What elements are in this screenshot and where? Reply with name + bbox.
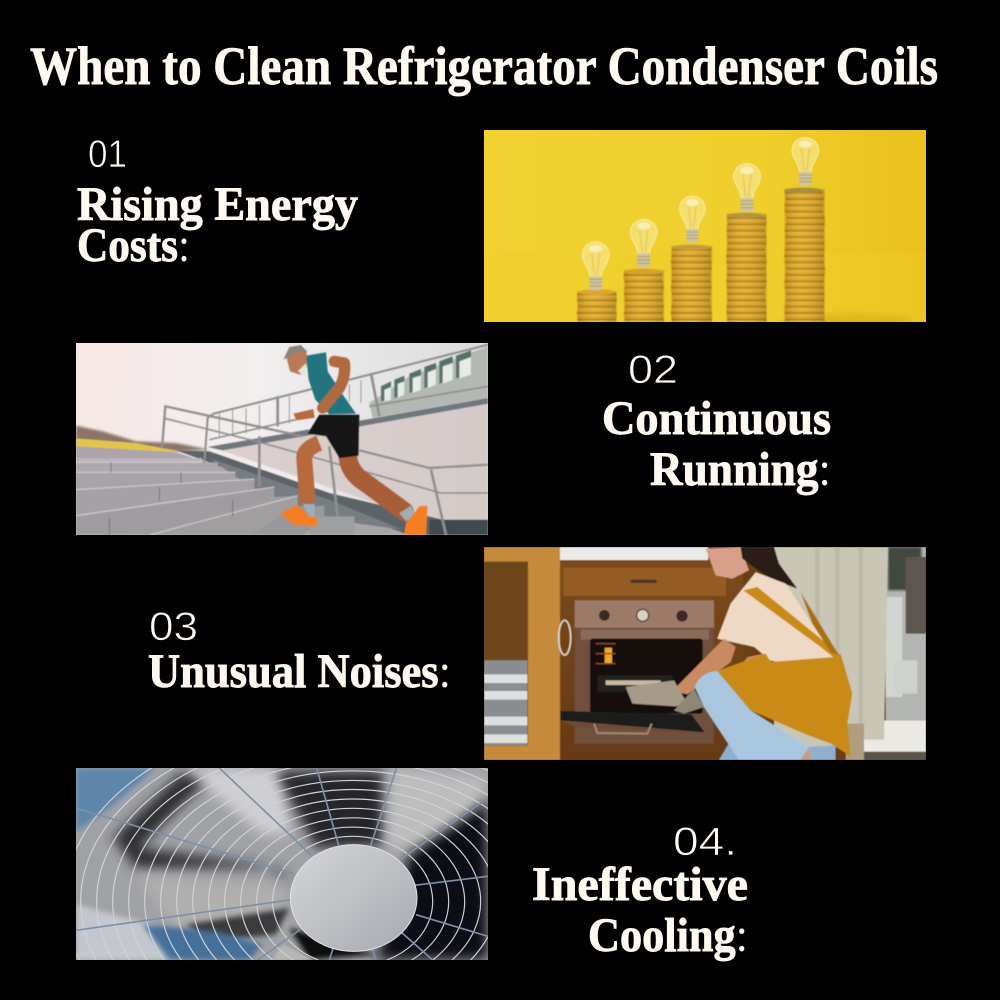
oven	[561, 600, 714, 744]
oven mitts	[626, 680, 687, 706]
panel: rising energy costs text	[77, 133, 358, 272]
wire grille rings	[65, 715, 641, 960]
photo: light bulbs on coin stacks	[484, 130, 926, 322]
number 03: 03	[149, 605, 198, 649]
railings	[162, 345, 488, 535]
chair	[846, 724, 864, 760]
bridge structure	[369, 346, 488, 418]
window and floor	[886, 547, 926, 720]
whisk	[559, 620, 571, 655]
panel: unusual noises text	[148, 605, 451, 698]
heading: ineffective cooling	[532, 858, 748, 962]
panel: ineffective cooling text	[532, 820, 748, 962]
counter	[560, 547, 708, 560]
rear leg	[348, 456, 404, 511]
heading: continuous running: Running:	[650, 443, 831, 496]
heading: continuous running: Continuous	[602, 392, 831, 445]
number 01: 01	[88, 133, 127, 176]
number 04: 04.	[673, 820, 737, 864]
runner	[280, 345, 428, 535]
heading: ineffective cooling: Ineffective	[532, 858, 748, 911]
heading: rising energy costs: Rising Energy	[77, 178, 358, 231]
fan hub	[290, 845, 417, 951]
shorts	[308, 415, 359, 458]
coin stacks	[577, 188, 825, 322]
number 02: 02	[628, 348, 678, 392]
cabinet	[560, 562, 743, 760]
heading: unusual noises: Unusual Noises:	[148, 645, 451, 698]
shoes	[303, 504, 415, 521]
shirt	[717, 572, 834, 662]
horizon	[76, 426, 209, 451]
head	[287, 346, 307, 375]
shirt	[306, 352, 356, 414]
heading: rising energy costs: Costs:	[77, 219, 190, 272]
photo: woman at the oven	[484, 547, 926, 760]
hair	[707, 547, 797, 589]
photo: man running up stairs	[76, 343, 488, 535]
bulbs	[582, 138, 819, 290]
arm	[672, 639, 736, 694]
apron	[717, 654, 852, 756]
heading: rising energy costs	[77, 178, 358, 272]
front leg	[304, 443, 319, 503]
arm	[323, 361, 345, 408]
heading: continuous running	[602, 392, 831, 496]
wall	[219, 403, 488, 520]
heading: ineffective cooling: Cooling:	[588, 909, 748, 962]
face	[706, 547, 749, 579]
blurred fan blades	[76, 768, 488, 960]
far leg	[719, 740, 836, 760]
curtain	[774, 547, 888, 747]
photo: condenser fan	[76, 768, 488, 960]
panel: continuous running text	[602, 348, 831, 496]
stairs	[76, 446, 488, 535]
woman	[626, 547, 864, 760]
shelf	[484, 547, 560, 760]
jeans	[695, 671, 809, 760]
radial spokes	[76, 768, 488, 960]
